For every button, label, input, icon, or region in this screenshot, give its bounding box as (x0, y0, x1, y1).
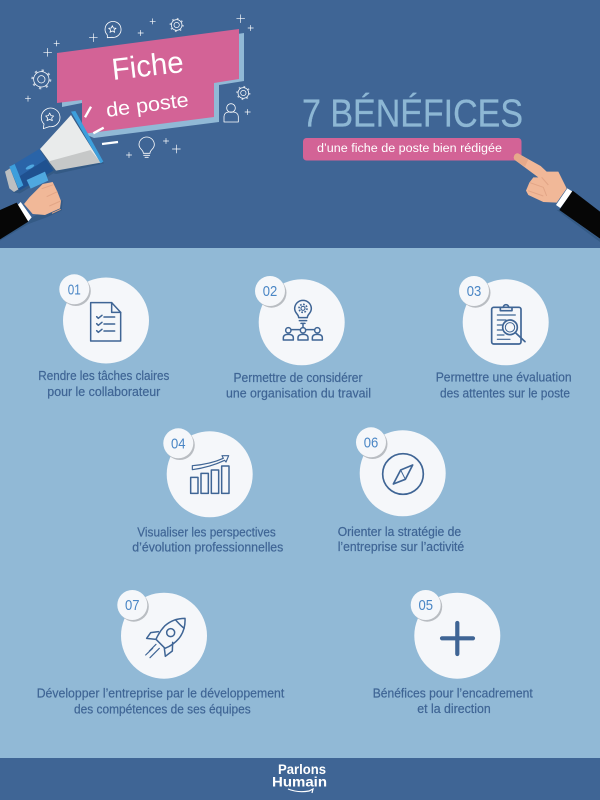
footer logo (272, 762, 327, 793)
icon: plus (442, 623, 473, 654)
circle 06 (360, 430, 446, 516)
logo word 1: Parlons (278, 762, 326, 777)
label 01 (38, 369, 169, 399)
circle 07 (121, 593, 207, 679)
label 04 (132, 526, 283, 555)
cuff (17, 202, 32, 222)
circle 05 (414, 593, 500, 679)
label 03: des attentes sur le poste (440, 386, 570, 400)
icon: clipboard with magnifier (492, 305, 525, 344)
item 06 (338, 427, 464, 554)
banner shape (57, 29, 239, 134)
palm and finger (514, 153, 567, 203)
cuff (556, 188, 573, 208)
badge 07 (117, 590, 149, 622)
cone rim (71, 111, 103, 163)
item 02 (226, 276, 371, 400)
sleeve (0, 203, 28, 239)
banner heading: Fiche (110, 45, 185, 87)
subtitle text: d’une fiche de poste bien rédigée (317, 143, 502, 155)
icon: rocket (146, 618, 185, 658)
badge 03: 03 (467, 283, 481, 300)
cone lower (49, 150, 101, 171)
label 04: Visualiser les perspectives (137, 526, 276, 540)
megaphone body (10, 149, 53, 191)
label 06: l’entreprise sur l’activité (338, 540, 464, 554)
banner: fiche de poste (57, 29, 244, 138)
decorative outline icons around banner (25, 15, 253, 158)
icon: compass (383, 454, 423, 494)
megaphone end cap (5, 168, 18, 192)
icon: growth chart (191, 456, 229, 493)
pointing hand shadow (557, 210, 600, 242)
label 07: des compétences de ses équipes (74, 702, 251, 716)
label 02: Permettre de considérer (234, 371, 362, 385)
label 05: et la direction (417, 702, 491, 716)
icon: checklist document (91, 303, 121, 341)
label 07 (37, 687, 285, 716)
badge 05 (411, 590, 442, 622)
label 07: Développer l’entreprise par le développement (37, 687, 285, 701)
icon: light bulb (139, 137, 154, 157)
icon: idea and team (283, 300, 322, 340)
subtitle pill (303, 138, 522, 160)
item 01 (38, 274, 169, 399)
icon: gear left (32, 70, 50, 88)
icon: person (224, 104, 238, 122)
label 02 (226, 371, 371, 400)
header band (0, 0, 600, 248)
title: 7 BÉNÉFICES (302, 92, 523, 136)
icon: gear right (237, 87, 250, 99)
badge 02: 02 (263, 283, 277, 300)
cone upper (40, 115, 101, 163)
banner subheading: de poste (105, 89, 190, 122)
hand shadow (0, 200, 63, 241)
body band (9, 164, 23, 188)
badge 01: 01 (68, 282, 81, 298)
badge 02 (255, 276, 286, 308)
icon: gear top (170, 19, 183, 31)
circle 02 (259, 279, 345, 365)
label 06: Orienter la stratégie de (338, 525, 461, 539)
sound streaks (85, 107, 118, 144)
badge 04: 04 (171, 436, 186, 452)
icon: speech bubble top (105, 21, 121, 38)
megaphone shadow (7, 115, 104, 193)
logo smile (288, 789, 313, 793)
item 07 (37, 590, 285, 716)
icon: speech bubble left (41, 108, 60, 129)
sleeve (559, 191, 600, 239)
label 03 (436, 371, 572, 400)
sparkles (25, 15, 253, 158)
label 05: Bénéfices pour l’encadrement (373, 687, 533, 701)
handle (27, 172, 48, 189)
circle 01 (63, 278, 149, 364)
badge 07: 07 (125, 597, 140, 614)
banner shadow (62, 33, 244, 138)
badge 04 (163, 428, 195, 460)
icon: pointing hand (514, 153, 600, 242)
label 02: une organisation du travail (226, 386, 371, 400)
label 05 (373, 687, 533, 716)
label 01: pour le collaborateur (47, 385, 160, 399)
button oval (25, 164, 35, 170)
badge 06: 06 (364, 434, 378, 452)
footer band (0, 758, 600, 800)
badge 05: 05 (418, 597, 433, 614)
label 01: Rendre les tâches claires (38, 369, 169, 383)
label 03: Permettre une évaluation (436, 371, 572, 385)
fist (24, 182, 61, 215)
circle 03 (463, 279, 549, 365)
fingertip (514, 153, 528, 167)
label 06 (338, 525, 464, 554)
logo word 2: Humain (272, 774, 327, 790)
circle 04 (167, 431, 253, 517)
icon: megaphone held by a hand (0, 107, 118, 241)
label 04: d’évolution professionnelles (132, 541, 283, 555)
item 04 (132, 428, 283, 555)
item 05 (373, 590, 533, 716)
item 03 (436, 276, 572, 400)
